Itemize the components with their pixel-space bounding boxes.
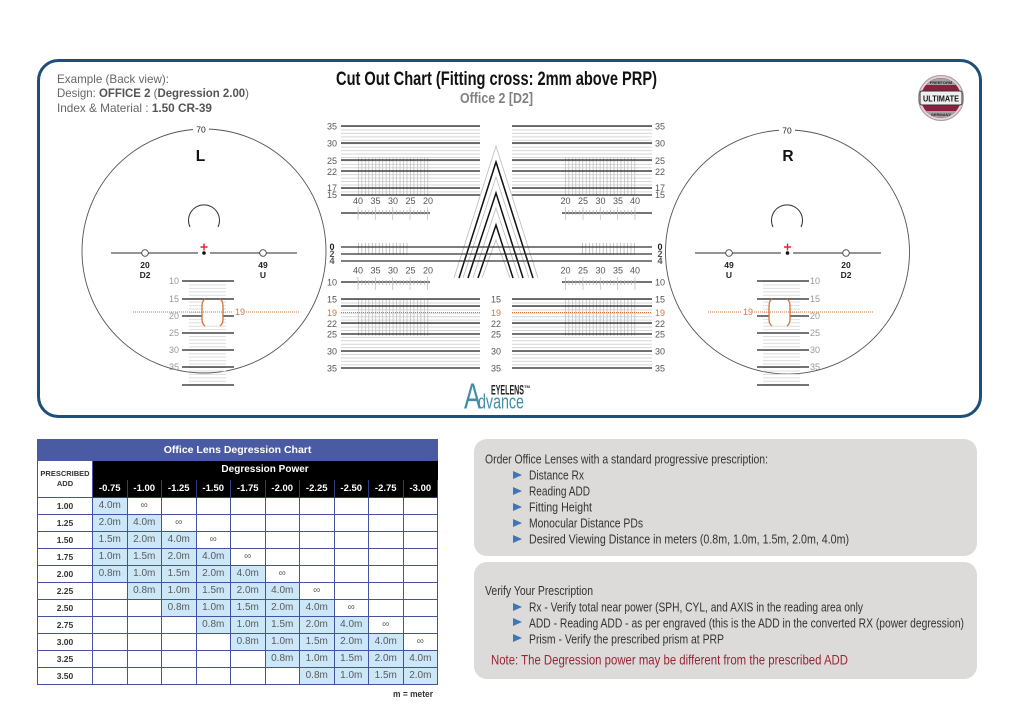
PD ruler lower right: 25 [578, 266, 588, 276]
left lens diagram [82, 124, 326, 385]
right height numbers [655, 122, 665, 200]
height ladder: 30 [169, 345, 179, 355]
lens outline L [82, 129, 326, 373]
table: office lens degression chart: Office Lens Degression Chart [164, 444, 311, 456]
table: office lens degression chart: ∞ [417, 636, 424, 647]
centre numbers [491, 294, 501, 374]
order list [529, 468, 849, 546]
PD ruler upper left: 40 [353, 196, 363, 206]
bullet icons [513, 471, 522, 543]
right height numbers: 30 [655, 138, 665, 148]
table: office lens degression chart: Degression Power [221, 464, 309, 475]
right numbers: 15 [655, 294, 665, 304]
engraving labels: U [726, 270, 732, 280]
eye letter R: R [782, 148, 794, 165]
engraving labels [724, 260, 852, 280]
table: office lens degression chart: ∞ [141, 500, 148, 511]
table: office lens degression chart: ∞ [175, 517, 182, 528]
logo: Advance Eyelens: A [464, 376, 481, 416]
PD ruler lower left: 10 [327, 278, 337, 288]
table: office lens degression chart: 2.0m [133, 534, 155, 545]
bullet icons [513, 603, 522, 642]
left height numbers: 30 [327, 138, 337, 148]
table: office lens degression chart: PRESCRIBED [40, 469, 90, 478]
heavy rules [341, 299, 652, 368]
table: office lens degression chart: ∞ [279, 568, 286, 579]
horizontal reference line [111, 252, 297, 254]
text block: example details [57, 72, 249, 115]
table: office lens degression chart: 2.0m [237, 585, 259, 596]
height ladder: 15 [810, 294, 820, 304]
table: office lens degression chart: 0.8m [133, 585, 155, 596]
table: office lens degression chart: 1.25 [57, 518, 73, 528]
order list: Distance Rx [529, 468, 584, 482]
logo: Advance Eyelens: TM [524, 384, 530, 389]
table: office lens degression chart: 1.0m [168, 585, 190, 596]
table: office lens degression chart: 2.0m [409, 670, 431, 681]
table: office lens degression chart: 4.0m [409, 653, 431, 664]
fitting cross and PRP dot [200, 244, 208, 255]
table: office lens degression chart: 1.0m [237, 619, 259, 630]
fitting height dotted line: 19 [235, 307, 245, 317]
table: office lens degression chart: 4.0m [375, 636, 397, 647]
table: office lens degression chart: 1.75 [57, 552, 73, 562]
height ladder: 25 [810, 328, 820, 338]
centre scale: upper [327, 122, 665, 220]
table: office lens degression chart: -1.75 [237, 483, 259, 494]
PD ruler lower left: 30 [388, 266, 398, 276]
table: office lens degression chart: 3.00 [57, 637, 73, 647]
left numbers: 19 [327, 308, 337, 318]
verify heading: Verify Your Prescription [485, 583, 593, 598]
table: office lens degression chart: 1.0m [202, 602, 224, 613]
table: office lens degression chart: 0.8m [168, 602, 190, 613]
panel: order instructions [474, 439, 977, 556]
PD ruler lower right: 10 [655, 278, 665, 288]
table: office lens degression chart: -2.00 [271, 483, 293, 494]
heavy rules [341, 126, 652, 195]
table: office lens degression chart: 4.0m [202, 551, 224, 562]
right numbers: 35 [655, 364, 665, 374]
table: office lens degression chart [37, 439, 438, 685]
table: office lens degression chart: 2.25 [57, 586, 73, 596]
PD ruler upper right [560, 196, 652, 220]
table: office lens degression chart: 2.0m [168, 551, 190, 562]
PD ruler upper right: 20 [560, 196, 571, 206]
engraving labels: 49 [258, 260, 268, 270]
table: office lens degression chart: 1.5m [237, 602, 259, 613]
PD ruler lower left: 20 [423, 266, 433, 276]
table: office lens degression chart: 1.0m [271, 636, 293, 647]
left height numbers: 17 [327, 183, 337, 193]
table: office lens degression chart: 1.5m [340, 653, 362, 664]
right numbers: 25 [655, 330, 665, 340]
table: office lens degression chart: 2.0m [375, 653, 397, 664]
order list: Fitting Height [529, 500, 592, 514]
left height numbers: 25 [327, 156, 337, 166]
PD ruler lower left: 40 [353, 266, 363, 276]
table: office lens degression chart: ∞ [313, 585, 320, 596]
table: office lens degression chart: -2.50 [340, 483, 362, 494]
left numbers 0 2 4 [329, 242, 335, 266]
left height numbers: 35 [327, 122, 337, 132]
centre numbers: 19 [491, 308, 501, 318]
PD ruler upper left: 25 [405, 196, 416, 206]
right height numbers: 25 [655, 156, 665, 166]
engraving labels: 20 [841, 260, 851, 270]
table: office lens degression chart: 2.00 [57, 569, 73, 579]
PD ruler lower left: 25 [405, 266, 416, 276]
right height numbers: 15 [655, 190, 665, 200]
centre scale: middle [327, 242, 665, 290]
engraving labels: U [260, 270, 266, 280]
height ladder: 10 [810, 276, 820, 286]
left height numbers [327, 122, 337, 200]
right numbers: 19 [655, 308, 665, 318]
table: office lens degression chart: 2.0m [306, 619, 328, 630]
table: office lens degression chart: ∞ [210, 534, 217, 545]
table: office lens degression chart: -3.00 [409, 483, 431, 494]
height ladder: 20 [810, 311, 820, 321]
table: office lens degression chart: 1.0m [306, 653, 328, 664]
panel: verify prescription [474, 562, 977, 679]
table: office lens degression chart: 1.0m [133, 568, 155, 579]
left numbers: 15 [327, 294, 337, 304]
table: office lens degression chart: 1.5m [168, 568, 190, 579]
icon: ultimate badge: ULTIMATE [923, 94, 960, 104]
centre numbers: 25 [491, 330, 501, 340]
table: office lens degression chart: ∞ [348, 602, 355, 613]
right numbers 0 2 4: 2 [657, 249, 663, 259]
table: office lens degression chart: 0.8m [237, 636, 259, 647]
engraving circles [142, 250, 266, 256]
right numbers 0 2 4: 4 [657, 256, 663, 266]
axis label 70 [193, 124, 209, 134]
right numbers: 30 [655, 346, 665, 356]
right lens diagram [666, 125, 910, 385]
icon: ultimate badge: GERMANY [931, 112, 952, 117]
fitting height dotted line: 19 [743, 307, 753, 317]
table: office lens degression chart: 3.50 [57, 671, 73, 681]
left numbers: 30 [327, 346, 337, 356]
table: office lens degression chart: 2.50 [57, 603, 73, 613]
lens outline R [666, 130, 910, 374]
table: office lens degression chart: 1.5m [375, 670, 397, 681]
right numbers 0 2 4 [657, 242, 663, 266]
fine horizontal rules [410, 299, 582, 368]
subtitle: Office 2 [D2] [460, 91, 533, 107]
left numbers 0 2 4: 4 [329, 256, 335, 266]
table: office lens degression chart: 0.8m [202, 619, 224, 630]
PD ruler lower left: 35 [370, 266, 381, 276]
right height numbers: 22 [655, 167, 665, 177]
logo: Advance Eyelens: dvance [478, 392, 524, 414]
centre scale: lower [327, 294, 665, 374]
height ladder: 10 [169, 276, 179, 286]
table: office lens degression chart: -0.75 [99, 483, 121, 494]
table: office lens degression chart: -1.00 [133, 483, 155, 494]
fitting cross and PRP dot [784, 244, 791, 255]
table: office lens degression chart: 2.0m [271, 602, 293, 613]
text block: example details: Design: OFFICE 2 (Degression 2.00) [57, 86, 249, 100]
table: office lens degression chart: 1.5m [271, 619, 293, 630]
frame cut-out brackets [182, 299, 234, 326]
PD ruler lower right: 35 [613, 266, 623, 276]
PD ruler upper right: 35 [613, 196, 623, 206]
table: office lens degression chart: 2.0m [340, 636, 362, 647]
centre numbers: 30 [491, 346, 501, 356]
text block: example details: Example (Back view): [57, 72, 169, 86]
left height numbers: 22 [327, 167, 337, 177]
left height numbers: 15 [327, 190, 337, 200]
table: office lens degression chart: 3.25 [57, 654, 73, 664]
order list: Reading ADD [529, 484, 590, 498]
left numbers: 35 [327, 364, 337, 374]
right numbers 0 2 4: 0 [657, 242, 663, 252]
height ladder: 15 [169, 294, 179, 304]
ticks at 0 to 4 [358, 243, 636, 255]
table: office lens degression chart: 1.5m [133, 551, 155, 562]
centre chevrons [454, 146, 538, 278]
right height numbers: 35 [655, 122, 665, 132]
fine grids [358, 299, 636, 336]
table: office lens degression chart: ∞ [382, 619, 389, 630]
title: Cut Out Chart (Fitting cross: 2mm above PRP) [336, 69, 657, 90]
heavy rules 0 2 4 [341, 247, 652, 261]
table: office lens degression chart: 4.0m [306, 602, 328, 613]
table: office lens degression chart: -1.50 [202, 483, 224, 494]
PD ruler lower right [560, 266, 665, 290]
table: office lens degression chart: ∞ [244, 551, 251, 562]
height ladder: 20 [169, 311, 179, 321]
PD ruler upper left: 20 [423, 196, 433, 206]
table: office lens degression chart: 1.5m [99, 534, 121, 545]
centre numbers: 15 [491, 294, 501, 304]
axis label 70: 70 [782, 126, 792, 136]
table: office lens degression chart: 2.0m [202, 568, 224, 579]
centre numbers: 22 [491, 319, 501, 329]
table: office lens degression chart: 0.8m [271, 653, 293, 664]
table: office lens degression chart: -2.75 [375, 483, 397, 494]
table: office lens degression chart: 1.5m [202, 585, 224, 596]
right height numbers: 17 [655, 183, 665, 193]
height ladder: 35 [810, 362, 820, 372]
axis label 70 [779, 125, 795, 136]
table: office lens degression chart: 4.0m [168, 534, 190, 545]
logo: Advance Eyelens [464, 376, 530, 416]
axis label 70: 70 [196, 124, 206, 134]
PD ruler upper right: 30 [595, 196, 606, 206]
height ladder: 25 [169, 328, 179, 338]
PD ruler lower right: 30 [595, 266, 606, 276]
near arc [188, 205, 220, 227]
height ladder [757, 276, 820, 385]
table: office lens degression chart: 4.0m [133, 517, 155, 528]
right numbers [655, 294, 665, 374]
table: office lens degression chart: 1.5m [306, 636, 328, 647]
engraving labels: D2 [140, 270, 151, 280]
PD ruler upper right: 25 [578, 196, 588, 206]
table: office lens degression chart: 1.0m [340, 670, 362, 681]
PD ruler upper right: 40 [630, 196, 640, 206]
horizontal reference line [695, 252, 881, 254]
fine grids [358, 157, 636, 195]
table: office lens degression chart: -2.25 [306, 483, 328, 494]
PD ruler upper left: 35 [370, 196, 381, 206]
near arc [772, 205, 803, 227]
table: office lens degression chart: 2.75 [57, 620, 73, 630]
icon: ultimate badge [918, 76, 964, 120]
order heading: Order Office Lenses with a standard progressive prescription: [485, 452, 768, 466]
height ladder [169, 276, 234, 385]
PD ruler lower right: 40 [630, 266, 640, 276]
PD ruler upper left: 30 [388, 196, 398, 206]
table: office lens degression chart: 1.00 [57, 501, 73, 511]
left numbers: 25 [327, 330, 337, 340]
order list: Desired Viewing Distance in meters (0.8m, 1.0m, 1.5m, 2.0m, 4.0m) [529, 532, 849, 546]
table: office lens degression chart: 4.0m [271, 585, 293, 596]
table: office lens degression chart: ADD [57, 479, 73, 488]
eye letter L: L [196, 148, 205, 165]
table: office lens degression chart: 1.50 [57, 535, 73, 545]
PD ruler lower right: 20 [560, 266, 571, 276]
table: office lens degression chart: 0.8m [99, 568, 121, 579]
table: office lens degression chart: 4.0m [237, 568, 259, 579]
verify list [529, 600, 964, 646]
logo: Advance Eyelens: EYELENS [491, 382, 524, 398]
table footnote: m = meter [393, 689, 433, 699]
height ladder: 35 [169, 362, 179, 372]
verify list: Rx - Verify total near power (SPH, CYL, and AXIS in the reading area only [529, 600, 863, 614]
table: office lens degression chart: 4.0m [99, 500, 121, 511]
engraving labels: 49 [724, 260, 734, 270]
right numbers: 22 [655, 319, 665, 329]
height ladder: 30 [810, 345, 820, 355]
table: office lens degression chart: 2.0m [99, 517, 121, 528]
orange 19 dotted rules [341, 312, 652, 314]
table: office lens degression chart: 1.0m [99, 551, 121, 562]
table: office lens degression chart: 4.0m [340, 619, 362, 630]
left numbers [327, 294, 337, 374]
verify list: Prism - Verify the prescribed prism at PRP [529, 632, 724, 646]
order list: Monocular Distance PDs [529, 516, 643, 530]
table: office lens degression chart: -1.25 [168, 483, 190, 494]
PD ruler upper left [341, 196, 433, 220]
centre numbers: 35 [491, 364, 501, 374]
table: office lens degression chart: 0.8m [306, 670, 328, 681]
engraving labels [140, 260, 268, 280]
text block: example details: Index & Material : 1.50 CR-39 [57, 101, 212, 115]
icon: ultimate badge: FREEFORM [930, 80, 953, 85]
frame cut-out brackets [757, 299, 809, 326]
left numbers 0 2 4: 0 [329, 242, 335, 252]
PD ruler lower left [327, 266, 433, 290]
note: Note: The Degression power may be different from the prescribed ADD [491, 652, 848, 668]
left numbers 0 2 4: 2 [329, 249, 335, 259]
engraving labels: 20 [140, 260, 150, 270]
fine horizontal rules [410, 126, 582, 195]
engraving labels: D2 [841, 270, 852, 280]
left numbers: 22 [327, 319, 337, 329]
panel: cut out chart frame [38, 60, 980, 416]
engraving circles [726, 250, 849, 256]
